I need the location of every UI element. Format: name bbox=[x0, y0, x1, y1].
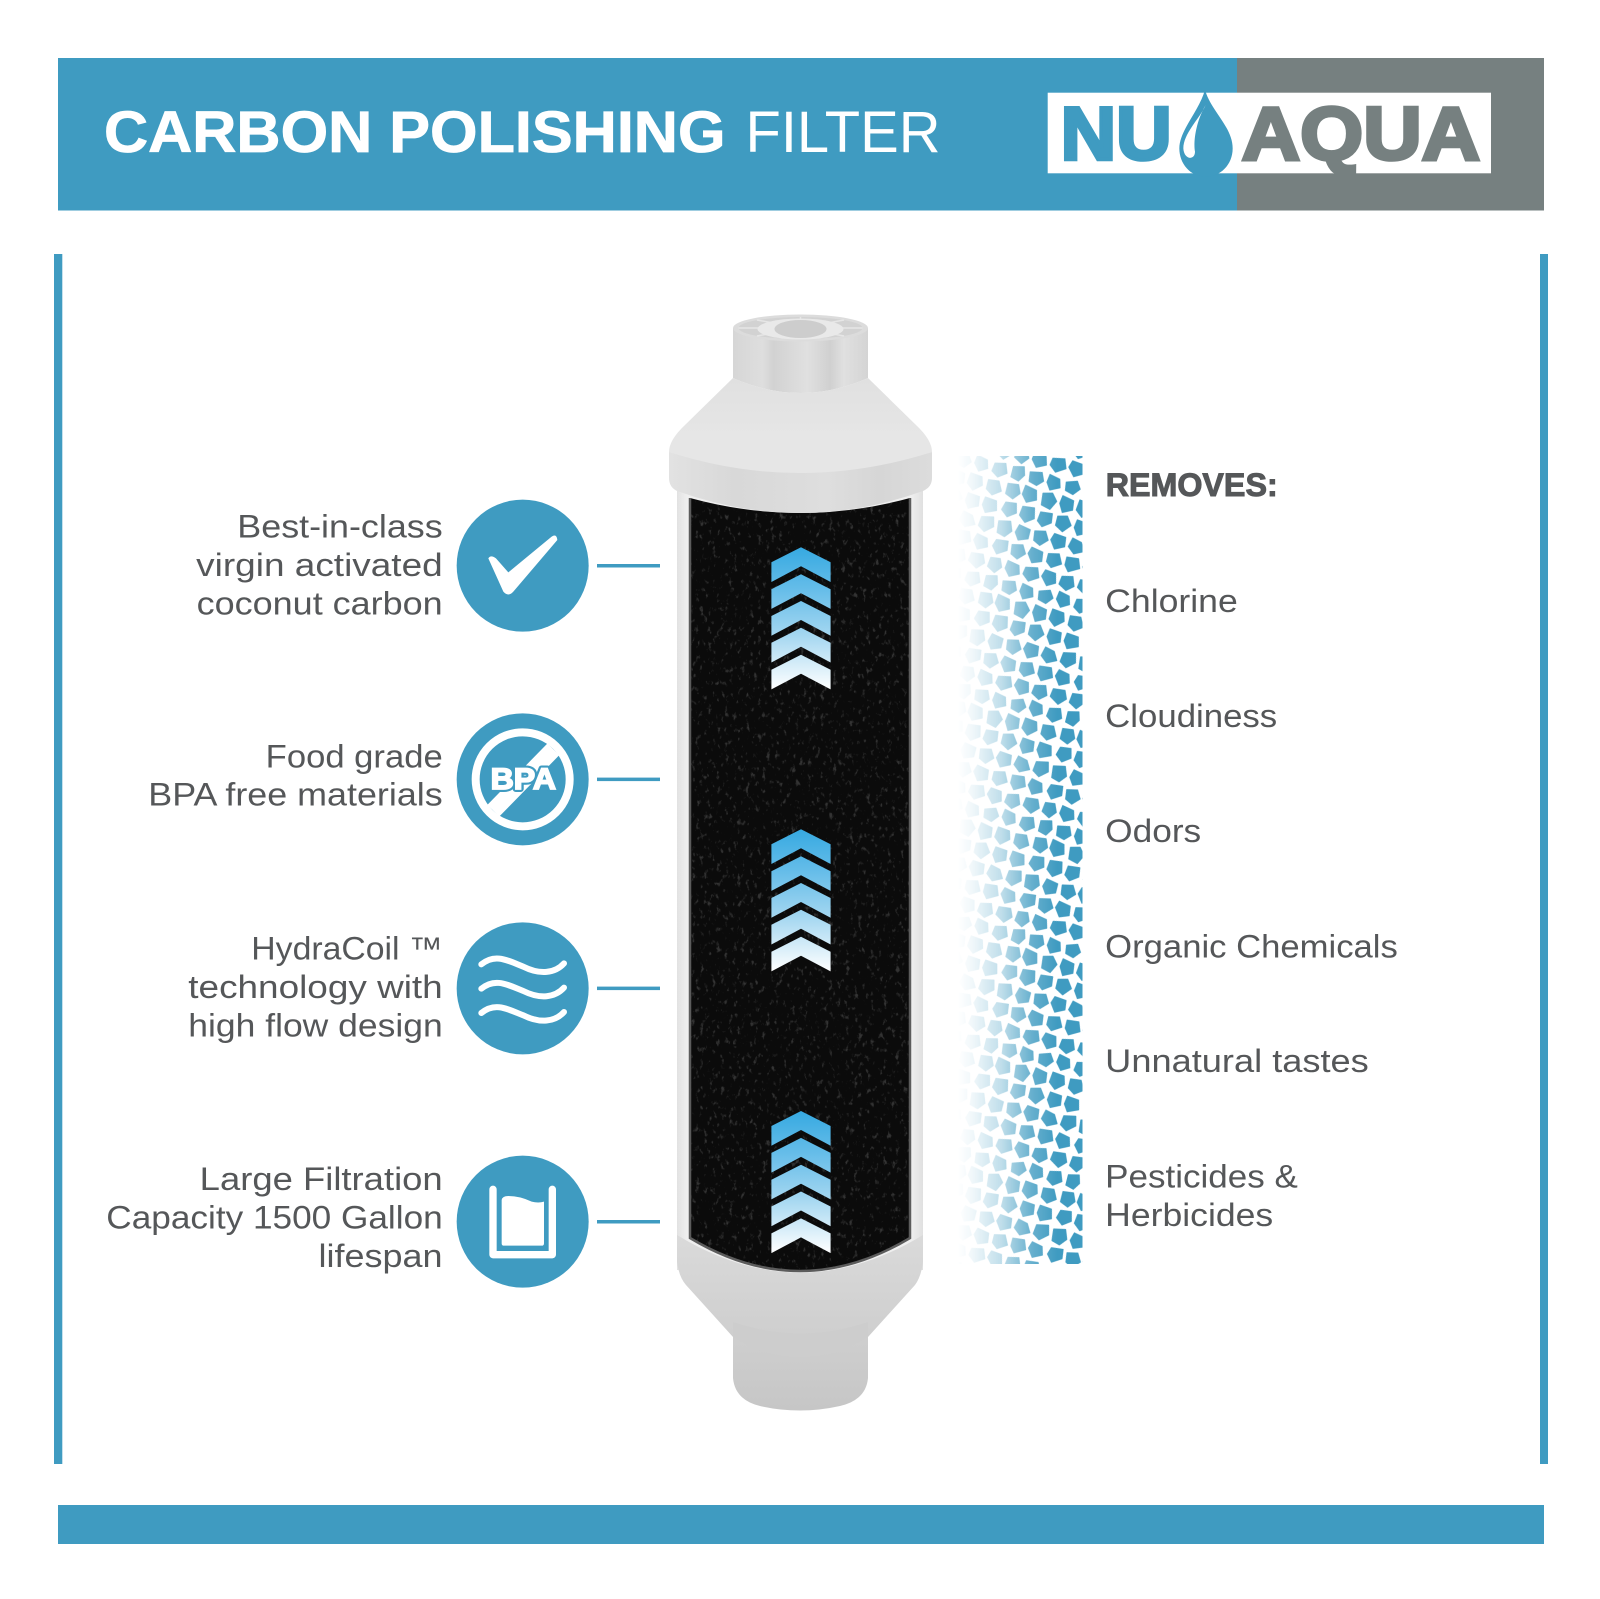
upper shoulder and flange bbox=[669, 378, 932, 513]
list items bbox=[1105, 583, 1398, 1233]
text: BPA free bbox=[148, 738, 443, 813]
icon: check mark bbox=[457, 500, 589, 632]
text: coconut carbon bbox=[196, 508, 443, 621]
text: filtration capacity: lifespan bbox=[318, 1238, 442, 1274]
feature: coconut carbon bbox=[196, 500, 660, 632]
list items: Cloudiness bbox=[1105, 698, 1277, 734]
icon: no BPA: BPA bbox=[491, 763, 556, 796]
left side rule bbox=[54, 254, 62, 1464]
text: HydraCoil: high flow design bbox=[188, 1008, 443, 1044]
footer bar bbox=[58, 1505, 1544, 1544]
text: HydraCoil: technology with bbox=[188, 969, 443, 1005]
header banner bbox=[58, 58, 1544, 210]
list items: Herbicides bbox=[1105, 1197, 1273, 1233]
connector line bbox=[597, 564, 660, 568]
heading: removes: REMOVES: bbox=[1106, 467, 1278, 503]
title: FILTER bbox=[746, 100, 940, 165]
icon: glass of water bbox=[457, 1156, 589, 1288]
flow arrows: top bbox=[771, 547, 831, 689]
removes list bbox=[1105, 467, 1398, 1233]
list items: Organic Chemicals bbox=[1105, 928, 1398, 964]
list items: Pesticides & bbox=[1105, 1158, 1298, 1194]
flow arrows: middle bbox=[771, 829, 831, 971]
flow arrows: bottom bbox=[771, 1111, 831, 1253]
list items: Chlorine bbox=[1105, 583, 1238, 619]
text: coconut carbon: virgin activated bbox=[196, 547, 443, 583]
text: filtration capacity: Large Filtration bbox=[200, 1161, 443, 1197]
connector line bbox=[597, 1220, 660, 1224]
connector line bbox=[597, 778, 660, 781]
text: coconut carbon: coconut carbon bbox=[197, 585, 443, 621]
logo: Nu Aqua: NU bbox=[1061, 92, 1172, 176]
text: BPA free: Food grade bbox=[266, 738, 443, 774]
feature: HydraCoil bbox=[188, 922, 660, 1054]
carbon block bbox=[690, 490, 911, 1280]
text: coconut carbon: Best-in-class bbox=[237, 508, 443, 544]
feature: filtration capacity bbox=[106, 1156, 660, 1288]
icon: no BPA: BPA bbox=[491, 763, 556, 796]
title: CARBON POLISHING bbox=[104, 100, 726, 165]
text: BPA free: BPA free materials bbox=[148, 777, 443, 813]
list items: Unnatural tastes bbox=[1105, 1043, 1369, 1079]
connector line bbox=[597, 987, 660, 990]
text: filtration capacity: Capacity 1500 Gallon bbox=[106, 1199, 443, 1235]
feature: BPA free bbox=[148, 713, 660, 845]
logo: Nu Aqua: AQUA bbox=[1242, 92, 1480, 176]
right side rule bbox=[1540, 254, 1548, 1464]
list items: Odors bbox=[1105, 813, 1201, 849]
text: HydraCoil bbox=[188, 930, 443, 1044]
text: filtration capacity bbox=[106, 1161, 443, 1274]
upper neck bbox=[733, 314, 868, 393]
filtration media mosaic bbox=[958, 456, 1082, 1264]
icon: water waves bbox=[457, 922, 589, 1054]
lower end cap bbox=[677, 1235, 923, 1410]
logo: Nu Aqua bbox=[1048, 89, 1491, 177]
icon: no BPA bbox=[457, 713, 589, 845]
icon: water drop bbox=[1179, 89, 1233, 177]
filter cartridge bbox=[669, 314, 932, 1410]
text: HydraCoil: HydraCoil ™ bbox=[251, 930, 443, 966]
body tube bbox=[677, 470, 923, 1270]
